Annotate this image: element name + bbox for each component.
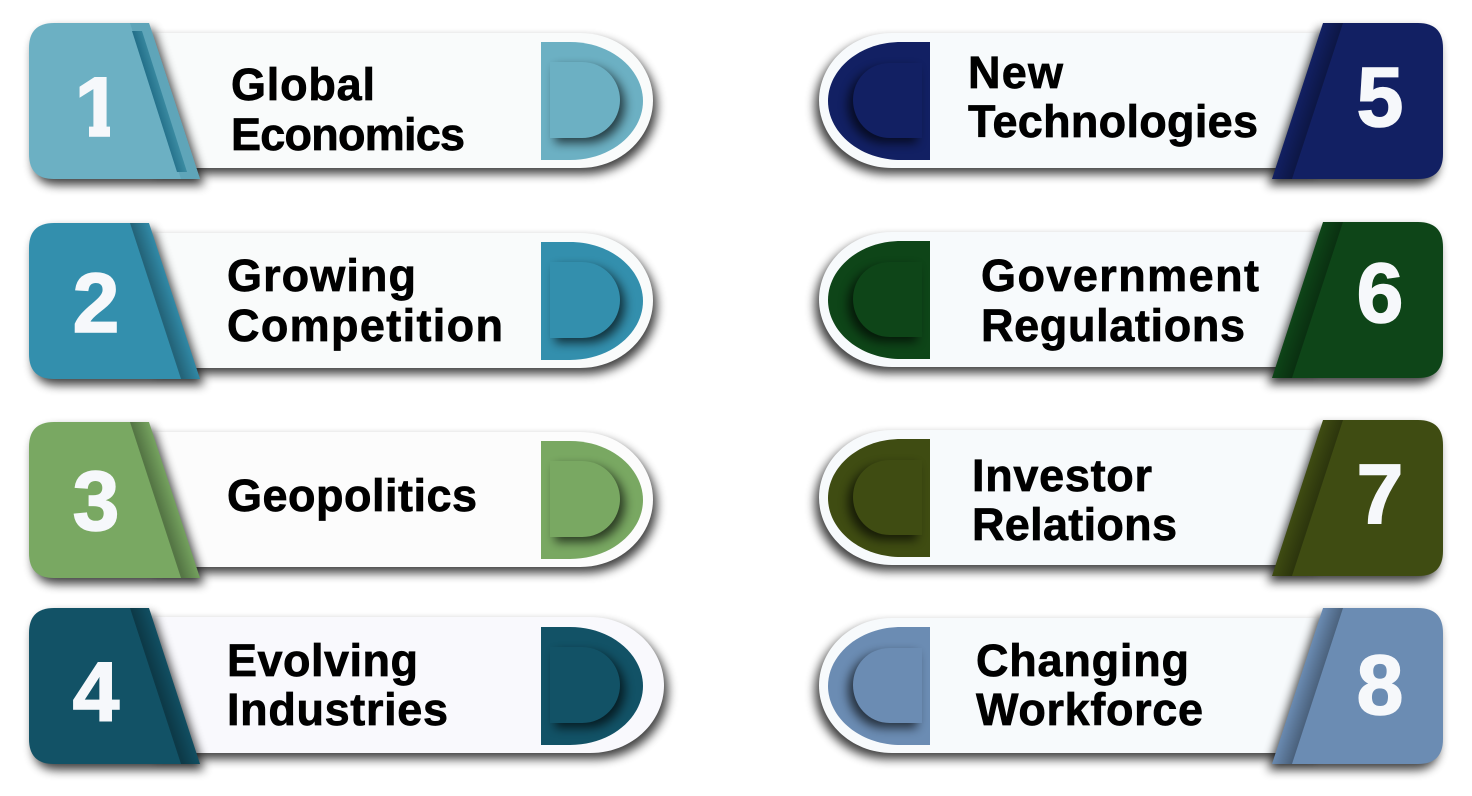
card [150, 233, 653, 368]
panel: 6 Government Regulations [819, 222, 1443, 378]
number 8: 8 [1357, 638, 1403, 732]
number tab [29, 223, 200, 379]
card [819, 618, 1320, 753]
panel: 7 Investor Relations [819, 420, 1443, 576]
heading: Investor Relations: Relations [972, 499, 1177, 550]
card [150, 33, 653, 168]
icon: D badge [541, 42, 643, 160]
panel: 4 Evolving Industries [29, 608, 664, 764]
heading: Government Regulations: Regulations [981, 300, 1245, 351]
heading: New Technologies: New [968, 47, 1064, 98]
card [819, 232, 1320, 367]
card [150, 617, 664, 753]
number tab [1272, 608, 1443, 764]
icon: D badge [541, 242, 643, 360]
heading: New Technologies [968, 47, 1258, 147]
heading: Investor Relations: Investor [972, 450, 1152, 501]
heading: Evolving Industries: Evolving [227, 635, 418, 686]
card [819, 33, 1320, 168]
heading: Geopolitics: Geopolitics [227, 470, 477, 521]
icon: D badge [828, 42, 930, 160]
heading: Investor Relations [972, 450, 1177, 550]
heading: Evolving Industries: Industries [227, 684, 448, 735]
panel: 5 New Technologies [819, 23, 1443, 179]
heading: New Technologies: Technologies [968, 96, 1258, 147]
number tab [29, 608, 200, 764]
card [819, 430, 1320, 565]
number 2: 2 [73, 256, 119, 350]
number 1: 1 [75, 60, 121, 154]
icon: D badge [541, 441, 643, 559]
card [150, 432, 653, 567]
number 7: 7 [1357, 447, 1403, 541]
number 6: 6 [1357, 246, 1403, 340]
icon: D badge [541, 627, 643, 745]
heading: Government Regulations: Government [981, 250, 1259, 301]
heading: Growing Competition: Growing [227, 250, 416, 301]
number tab [29, 422, 200, 578]
panel: 8 Changing Workforce [819, 608, 1443, 764]
panel: 3 Geopolitics [29, 422, 653, 578]
number 4: 4 [73, 645, 120, 739]
heading: Growing Competition [227, 250, 503, 351]
number tab [1272, 222, 1443, 378]
number 3: 3 [73, 454, 119, 548]
heading: Global Economics: Global [231, 59, 375, 110]
heading: Global Economics: Economics [231, 109, 465, 160]
number 5: 5 [1357, 50, 1403, 144]
heading: Changing Workforce [976, 635, 1203, 735]
panel: 1 Global Economics [29, 23, 653, 179]
icon: D badge [828, 439, 930, 557]
icon: D badge [828, 627, 930, 745]
heading: Growing Competition: Competition [227, 300, 503, 351]
icon: D badge [828, 241, 930, 359]
panel: 2 Growing Competition [29, 223, 653, 379]
number tab [29, 23, 200, 179]
heading: Changing Workforce: Changing [976, 635, 1189, 686]
heading: Evolving Industries [227, 635, 448, 735]
heading: Global Economics [231, 59, 465, 160]
number tab [1272, 23, 1443, 179]
heading: Changing Workforce: Workforce [976, 684, 1203, 735]
number tab [1272, 420, 1443, 576]
heading: Government Regulations [981, 250, 1259, 351]
